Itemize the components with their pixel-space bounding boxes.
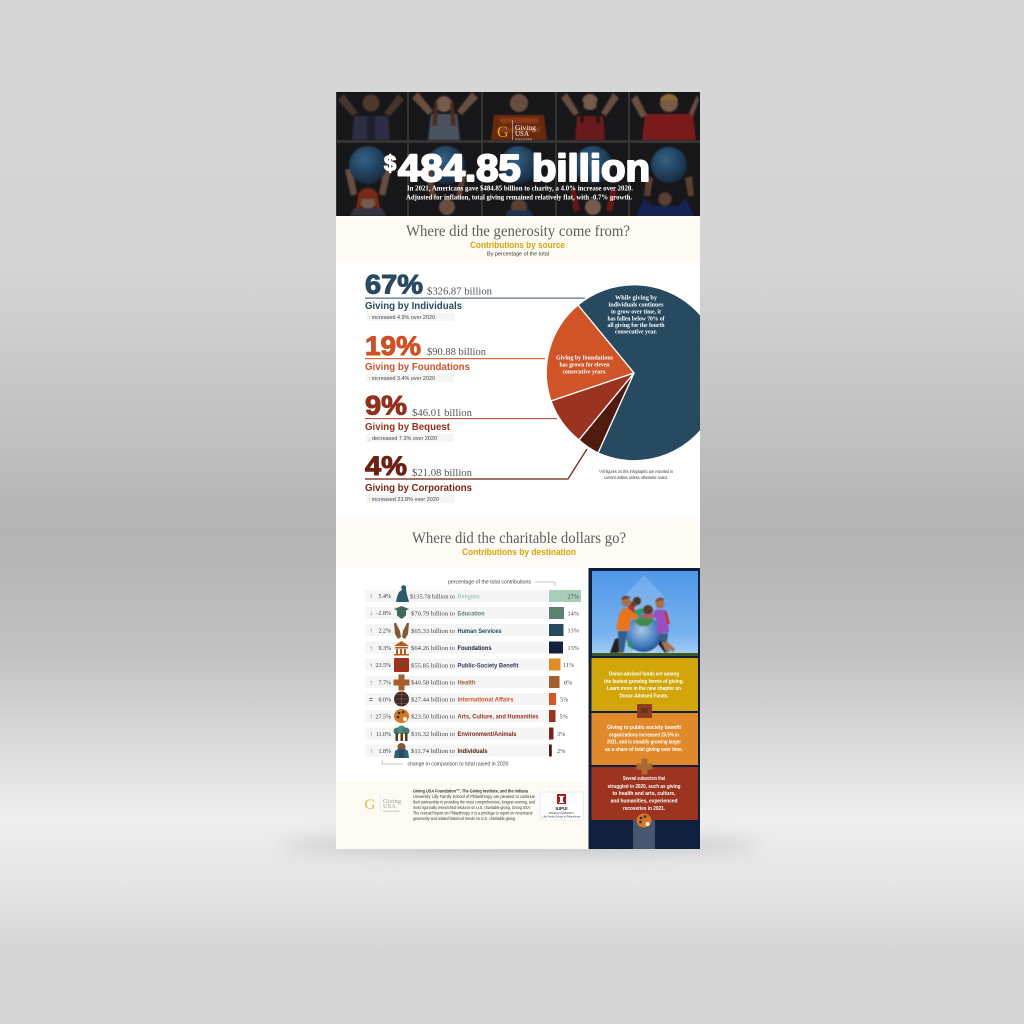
row: religion: [365, 585, 581, 602]
row: human services: $65.33 billion to: [411, 628, 456, 635]
row: foundations: $64.26 billion to: [411, 645, 456, 652]
source: bequest: ↓: [368, 436, 371, 442]
row: education: 14%: [568, 610, 579, 618]
source: corporations: [365, 449, 587, 504]
chart axis note: change: change in comparison to total raised in 2020: [408, 762, 509, 768]
row: environment: 11.0%: [376, 732, 391, 738]
footer text: University Lilly Family School of Philanthropy are pleased to continue: [413, 794, 535, 800]
pie callout: individuals: While giving by: [615, 296, 657, 302]
pie chart: [546, 285, 700, 460]
source: corporations: 4%: [365, 451, 407, 481]
footer band: [336, 782, 588, 849]
pie callout: individuals: to grow over time, it: [611, 310, 661, 316]
row: public-society benefit: [365, 658, 574, 672]
IUPUI logo box: IUPUI: [555, 806, 568, 811]
logo: Giving USA white: Giving: [515, 123, 536, 132]
row: individuals: Individuals: [458, 749, 488, 755]
row: international affairs: [365, 692, 568, 706]
callout: public-society benefit: 2021, and is steadily growing larger: [607, 740, 682, 746]
callout: donor-advised funds: [592, 658, 698, 711]
row: arts: 27.5%: [376, 714, 391, 720]
row: public-society benefit: ↑: [370, 663, 372, 669]
row: health: [365, 674, 572, 690]
footer logo: Giving: [383, 798, 402, 805]
callout: subsectors recovery: struggled in 2020, such as giving: [608, 784, 681, 790]
icon: connector chest: [637, 704, 652, 718]
row: foundations: 9.3%: [378, 646, 391, 652]
footer text: [413, 788, 535, 822]
footer logo: [364, 795, 402, 813]
source: foundations: Giving by Foundations: [365, 361, 470, 373]
callout: public-society benefit: Giving to public-society benefit: [607, 725, 681, 731]
row: education: $70.79 billion to: [411, 610, 456, 618]
source: foundations: [365, 331, 545, 382]
row: international affairs: 0.0%: [378, 698, 391, 704]
row: arts: [365, 709, 568, 723]
row: human services: 2.2%: [378, 628, 391, 634]
source: individuals: $326.87 billion: [427, 286, 493, 298]
row: health: Health: [458, 680, 476, 686]
chart axis note: percentage: [448, 580, 555, 586]
callout: subsectors recovery: and humanities, experienced: [610, 798, 678, 804]
row: environment: $16.32 billion to: [411, 731, 456, 738]
footer text: The Annual Report on Philanthropy. It is a privilege to report on Americans': [413, 810, 533, 816]
row: environment: [365, 726, 565, 741]
row: individuals: 2%: [557, 748, 565, 755]
IUPUI logo box: [540, 792, 584, 820]
headline description: [406, 184, 633, 202]
row: health: ↑: [370, 680, 372, 686]
row: individuals: $11.74 billion to: [411, 748, 456, 755]
row: individuals: 1.8%: [378, 749, 391, 755]
footnote: *All figures on this infographic are reported in: [599, 469, 673, 474]
row: individuals: ↑: [370, 749, 372, 755]
row: human services: Human Services: [458, 629, 502, 635]
source: bequest: 9%: [365, 390, 407, 420]
source: individuals: 67%: [365, 270, 423, 300]
source: bequest: $46.01 billion: [412, 408, 473, 419]
row: arts: ↑: [370, 714, 372, 720]
footer logo: G: [364, 797, 376, 813]
source: corporations: $21.08 billion: [412, 468, 473, 479]
header photo banner: [336, 92, 700, 216]
source: foundations: ↑: [368, 376, 371, 382]
logo: Giving USA white: Giving Institute: [515, 137, 533, 141]
source: individuals: ↑: [368, 314, 371, 322]
section heading: sources: [336, 217, 700, 263]
source: foundations: $90.88 billion: [427, 347, 487, 358]
icon: columned building: [394, 641, 409, 656]
grass: [592, 653, 698, 656]
footer text: Giving USA Foundation™, The Giving Institute, and the Indiana: [413, 788, 528, 794]
source: foundations: increased 3.4% over 2020: [372, 376, 435, 382]
pie callout: foundations: Giving by foundations: [556, 356, 614, 362]
infographic page panel: [336, 92, 700, 849]
footer text: their partnership in providing the most comprehensive, longest-running, and: [413, 800, 535, 806]
row: arts: $23.50 billion to: [411, 714, 456, 720]
row: foundations: Foundations: [458, 646, 492, 652]
pie callout: individuals: [608, 296, 665, 336]
callout: public-society benefit: as a share of total giving over time.: [605, 747, 683, 753]
IUPUI logo box: Lilly Family School of Philanthropy: [542, 816, 581, 818]
footer text: most rigorously researched resource on U.S. charitable giving, Giving USA:: [413, 805, 531, 811]
section heading: sources: Contributions by source: [470, 240, 565, 250]
row: foundations: [365, 641, 579, 656]
section heading: destinations: Contributions by destination: [462, 547, 576, 557]
row: health: $40.58 billion to: [411, 680, 456, 686]
icon: trees: [394, 726, 410, 741]
up arrow overlay: [620, 575, 668, 656]
chart axis note: percentage: percentage of the total contributions: [448, 580, 532, 586]
icon: medical cross: [394, 674, 410, 690]
pie callout: individuals: has fallen below 70% of: [608, 316, 665, 322]
row: religion: $135.78 billion to: [410, 594, 456, 600]
row: public-society benefit: Public-Society Benefit: [458, 664, 518, 670]
headline description: Adjusted for inflation, total giving remained relatively flat, with -0.7% growth.: [406, 194, 632, 202]
source: corporations: increased 23.8% over 2020: [372, 497, 439, 503]
row: human services: ↑: [370, 628, 372, 634]
callout: public-society benefit: [592, 713, 698, 765]
row: health: 8%: [564, 680, 572, 686]
source: bequest: [365, 390, 557, 442]
callout: donor-advised funds: the fastest growing forms of giving.: [604, 679, 684, 685]
row: public-society benefit: $55.85 billion to: [411, 662, 456, 670]
source: individuals: Giving by Individuals: [365, 300, 462, 312]
source: individuals: [365, 270, 585, 322]
row: education: Education: [458, 612, 485, 618]
pie callout: foundations: [556, 356, 614, 376]
chart axis note: change: [382, 760, 509, 768]
pie callout: individuals: consecutive year.: [615, 330, 657, 336]
row: international affairs: $27.44 billion to: [411, 696, 456, 704]
callout: donor-advised funds: Donor-advised funds are among: [609, 672, 679, 678]
row: international affairs: =: [369, 698, 373, 704]
row: international affairs: International Affairs: [458, 698, 514, 704]
section heading: sources: Where did the generosity come from?: [406, 223, 630, 240]
right column frame: [588, 568, 700, 849]
section heading: sources: By percentage of the total: [487, 252, 549, 258]
IUPUI logo box: INDIANA UNIVERSITY: [549, 812, 575, 815]
row: education: [365, 606, 579, 619]
headline amount: $: [384, 151, 396, 176]
row: public-society benefit: 23.5%: [376, 663, 391, 669]
callout: subsectors recovery: recoveries in 2021.: [623, 806, 665, 812]
row: public-society benefit: 11%: [563, 662, 574, 669]
section heading: destinations: Where did the charitable dollars go?: [412, 530, 626, 547]
row: religion: 27%: [568, 594, 579, 600]
source: bequest: Giving by Bequest: [365, 421, 450, 433]
row: religion: Religion: [458, 594, 480, 600]
row: environment: Environment/Animals: [458, 732, 517, 738]
icon: connector cross: [636, 758, 652, 774]
headline description: In 2021, Americans gave $484.85 billion to charity, a 4.0% increase over 2020.: [407, 184, 633, 192]
footer logo: Giving Institute: [383, 810, 400, 813]
icon: graduation cap: [394, 606, 409, 619]
row: education: -2.8%: [376, 611, 391, 617]
row: human services: 13%: [568, 628, 579, 634]
row: religion: 5.4%: [378, 594, 391, 600]
pie callout: foundations: consecutive years.: [562, 370, 607, 376]
icon: palette: [394, 709, 409, 723]
pie callout: foundations: has grown for eleven: [560, 362, 610, 368]
section heading: destinations: [336, 519, 700, 568]
callout: donor-advised funds: Donor-Advised Funds.: [620, 694, 669, 700]
pale stripe at column foot: [633, 820, 655, 849]
headline amount: 484.85 billion: [398, 148, 650, 190]
icon: thinker statue: [396, 585, 409, 602]
footnote: current dollars unless otherwise noted.: [604, 475, 668, 480]
footnote: [599, 469, 673, 480]
icon: people: [394, 743, 409, 758]
row: foundations: ↑: [370, 646, 372, 652]
pie callout: individuals: individuals continues: [608, 302, 664, 308]
icon: hands: [394, 623, 409, 639]
row: arts: Arts, Culture, and Humanities: [458, 714, 539, 720]
pie callout: individuals: all giving for the fourth: [608, 323, 665, 329]
icon: world globe: [394, 692, 409, 706]
footer logo: USA: [383, 803, 396, 810]
source: bequest: decreased 7.3% over 2020: [372, 436, 437, 442]
row: international affairs: 5%: [560, 696, 568, 704]
row: arts: 5%: [560, 714, 568, 720]
callout: subsectors recovery: [592, 767, 698, 820]
logo: Giving USA white: USA: [515, 130, 529, 138]
footer text: generosity and related historical trends on U.S. charitable giving.: [413, 816, 516, 822]
logo: Giving USA white: G: [497, 124, 509, 141]
row: education: ↓: [370, 611, 372, 617]
row: religion: ↑: [370, 594, 372, 600]
logo: Giving USA white: [497, 120, 536, 141]
callout: donor-advised funds: Learn more in the new chapter on: [607, 686, 681, 692]
callout: public-society benefit: organizations increased 23.5% in: [609, 732, 679, 738]
row: environment: ↑: [370, 732, 372, 738]
row: environment: 3%: [557, 731, 565, 738]
photo: children with globe: [592, 571, 698, 656]
row: foundations: 13%: [568, 645, 579, 652]
callout: subsectors recovery: to health and arts, culture,: [612, 791, 676, 797]
row: health: 7.7%: [378, 680, 391, 686]
icon: connector palette: [636, 814, 652, 828]
row: human services: [365, 623, 579, 639]
source: individuals: increased 4.9% over 2020: [372, 315, 435, 321]
source: corporations: ↑: [368, 496, 371, 504]
source: foundations: 19%: [365, 331, 421, 361]
callout: subsectors recovery: Several subsectors that: [623, 776, 665, 782]
row: individuals: [365, 743, 565, 758]
source: corporations: Giving by Corporations: [365, 482, 472, 494]
icon: red chest: [394, 658, 409, 672]
children and globe: [610, 596, 675, 654]
